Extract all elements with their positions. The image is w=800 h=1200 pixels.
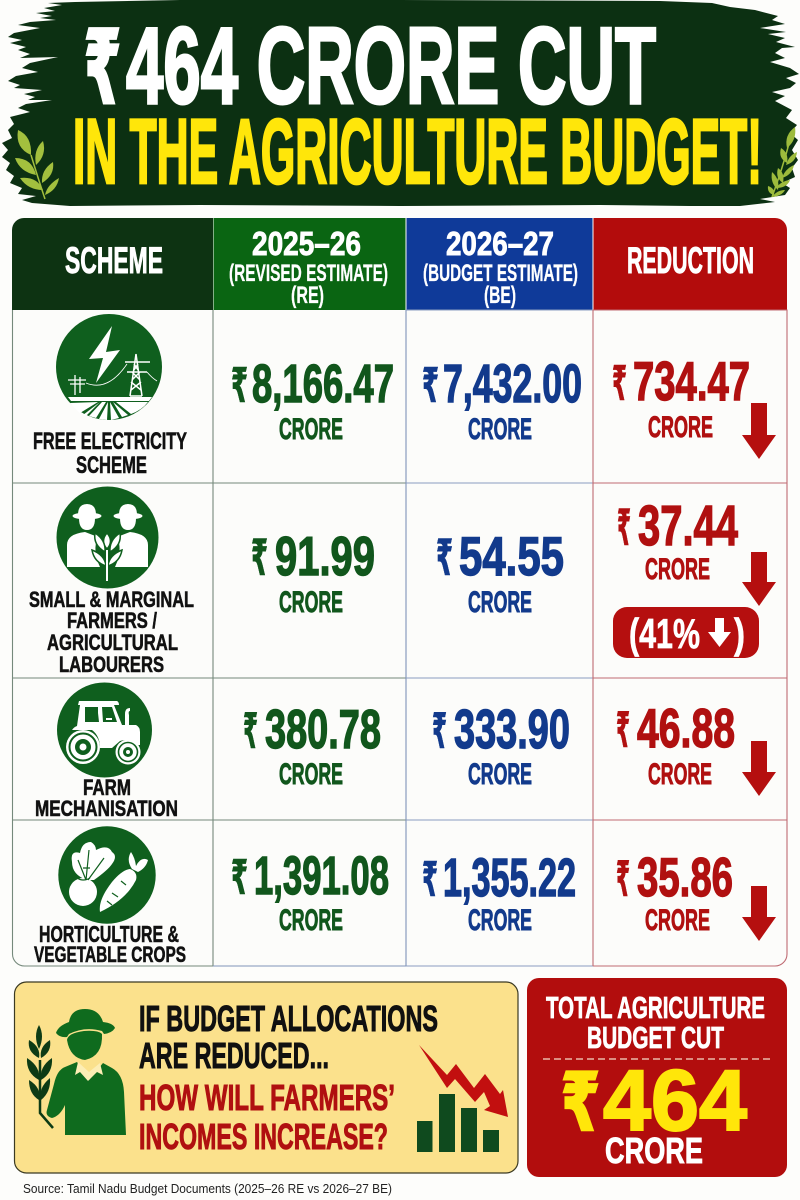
scheme label	[33, 428, 187, 479]
table body background	[12, 218, 787, 966]
panel heading	[546, 990, 765, 1055]
scheme label: SCHEME	[76, 452, 147, 479]
2025-26 value: 380.78	[265, 698, 381, 760]
table grid lines	[12, 310, 787, 966]
header cell: 2025-26: (REVISED ESTIMATE)	[229, 260, 388, 287]
2025-26 value: CRORE	[279, 904, 343, 937]
2025-26 value: ₹	[251, 530, 268, 586]
title banner	[2, 0, 799, 206]
scheme label: FARM	[83, 775, 131, 800]
icon: tractor	[57, 682, 152, 778]
2026-27 value: 7,432.00	[443, 354, 582, 414]
reduction value: ₹	[616, 704, 630, 758]
row: farm mechanisation	[35, 682, 776, 821]
reduction value: CRORE	[645, 553, 710, 586]
reduction value: CRORE	[645, 904, 710, 937]
header cell: 2025-26: (RE)	[291, 282, 324, 309]
reduction value	[616, 697, 735, 791]
brush stroke background	[2, 0, 799, 206]
2025-26 value	[231, 846, 389, 937]
scheme label: VEGETABLE CROPS	[34, 942, 186, 967]
total unit: CRORE	[605, 1130, 703, 1171]
scheme label: LABOURERS	[59, 652, 164, 677]
scheme label: HORTICULTURE &	[39, 921, 179, 947]
reduction value: 46.88	[637, 697, 735, 759]
2025-26 value	[243, 698, 381, 791]
reduction value: ₹	[617, 500, 631, 556]
icon: right leaves	[768, 127, 797, 197]
icon: farmer with wheat	[27, 1009, 126, 1135]
title line one: ₹	[84, 11, 121, 125]
total amount: 464	[603, 1053, 747, 1149]
reduction value: CRORE	[648, 758, 712, 791]
reduction value: ₹	[616, 853, 630, 907]
2025-26 value: 1,391.08	[254, 846, 389, 906]
2026-27 value: ₹	[422, 854, 438, 907]
arrow: down	[742, 741, 776, 796]
2025-26 value: 91.99	[275, 525, 375, 587]
arrow: down	[742, 886, 776, 941]
header cell: 2025-26	[214, 218, 406, 310]
2026-27 value	[436, 525, 564, 619]
question text	[139, 998, 438, 1157]
scheme label: FREE ELECTRICITY	[33, 428, 187, 455]
icon: falling bar chart	[417, 1045, 508, 1152]
header cell: 2026-27	[406, 218, 592, 310]
reduction value	[612, 350, 750, 444]
icon: two farmers with wheat	[56, 486, 158, 588]
icon: left leaves	[15, 130, 59, 199]
reduction value: 35.86	[637, 846, 733, 908]
panel: total budget cut	[527, 978, 787, 1177]
header cell: 2026-27: (BUDGET ESTIMATE)	[423, 260, 578, 287]
2026-27 value: ₹	[422, 360, 439, 413]
percent badge	[613, 607, 759, 658]
header cell: reduction	[594, 218, 787, 310]
2025-26 value: ₹	[231, 852, 248, 905]
total amount: ₹	[561, 1058, 600, 1147]
scheme label: MECHANISATION	[35, 796, 178, 821]
reduction value: CRORE	[648, 411, 713, 444]
scheme label: FARMERS /	[67, 608, 157, 633]
2025-26 value: CRORE	[279, 413, 343, 446]
percent badge: )	[734, 610, 745, 657]
row: free electricity scheme	[33, 314, 776, 479]
icon: tomato, leaves and carrot	[58, 826, 156, 924]
2025-26 value: CRORE	[279, 586, 343, 619]
reduction value: 37.44	[638, 494, 738, 558]
2026-27 value: CRORE	[468, 904, 532, 937]
2026-27 value: 54.55	[459, 525, 564, 587]
2026-27 value: CRORE	[468, 586, 532, 619]
header cell: 2025-26: 2025–26	[252, 225, 361, 262]
scheme label: AGRICULTURAL	[47, 630, 178, 655]
header cell: 2026-27: (BE)	[484, 282, 516, 309]
2026-27 value: 1,355.22	[443, 848, 576, 908]
source note: Source: Tamil Nadu Budget Documents (2025–26 RE vs 2026–27 BE)	[23, 1182, 392, 1196]
2026-27 value	[422, 354, 582, 446]
question text: HOW WILL FARMERS’	[139, 1077, 395, 1118]
header cell: 2026-27: 2026–27	[446, 225, 554, 262]
reduction value: 734.47	[633, 350, 750, 412]
percent badge: (41%	[629, 610, 700, 657]
2025-26 value: ₹	[231, 360, 248, 413]
2025-26 value: CRORE	[279, 758, 343, 791]
header cell: scheme	[12, 218, 213, 310]
scheme label: SMALL & MARGINAL	[29, 587, 194, 612]
reduction value: ₹	[612, 358, 627, 411]
2025-26 value	[231, 354, 394, 446]
icon: electricity pylon and field	[56, 314, 162, 420]
2025-26 value: 8,166.47	[252, 354, 394, 414]
panel heading: BUDGET CUT	[587, 1020, 724, 1055]
2026-27 value: ₹	[432, 705, 447, 759]
reduction value	[616, 846, 733, 937]
panel: question callout	[14, 982, 518, 1173]
question text: IF BUDGET ALLOCATIONS	[139, 998, 438, 1039]
reduction value	[617, 494, 738, 586]
comparison table	[12, 218, 787, 967]
row: horticulture and vegetable crops	[34, 826, 776, 967]
2026-27 value	[422, 848, 576, 937]
2026-27 value: CRORE	[468, 413, 532, 446]
arrow: down	[742, 552, 776, 606]
2025-26 value	[251, 525, 375, 619]
2026-27 value: 333.90	[454, 698, 570, 760]
scheme label	[34, 921, 186, 967]
2025-26 value: ₹	[243, 705, 258, 759]
2026-27 value: ₹	[436, 530, 453, 586]
2026-27 value: CRORE	[468, 758, 532, 791]
question text: INCOMES INCREASE?	[139, 1116, 388, 1157]
scheme label	[35, 775, 178, 821]
header cell: scheme: SCHEME	[65, 240, 163, 281]
question text: ARE REDUCED...	[139, 1035, 329, 1076]
2026-27 value	[432, 698, 570, 791]
arrow: down	[742, 403, 776, 459]
row: small and marginal farmers	[29, 486, 776, 677]
scheme label	[29, 587, 194, 677]
